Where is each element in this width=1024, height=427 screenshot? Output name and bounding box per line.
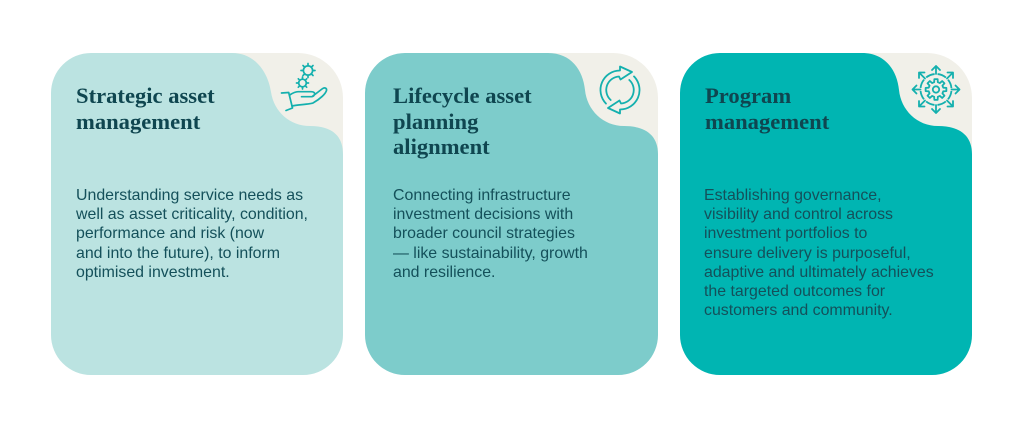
heading: program management — [705, 83, 830, 134]
heading: program management: Program — [705, 83, 791, 108]
icon: circular arrows — [600, 66, 640, 114]
panel: strategic asset management background — [51, 53, 343, 375]
panel: program management background — [680, 53, 972, 375]
text: strategic asset management description: and into the future), to inform — [76, 245, 280, 262]
text: lifecycle asset planning alignment description — [393, 187, 588, 281]
heading: lifecycle asset planning alignment: alignment — [393, 134, 490, 159]
panel: lifecycle asset planning alignment background — [365, 53, 658, 375]
heading: lifecycle asset planning alignment — [393, 83, 532, 159]
text: program management description: Establishing governance, — [704, 187, 882, 204]
text: program management description: adaptive and ultimately achieves — [704, 264, 934, 281]
text: program management description: customers and community. — [704, 302, 893, 319]
heading: program management: management — [705, 108, 829, 134]
text: lifecycle asset planning alignment description: broader council strategies — [393, 225, 575, 242]
text: program management description: investment portfolios to — [704, 225, 867, 242]
text: lifecycle asset planning alignment description: investment decisions with — [393, 206, 573, 223]
heading: strategic asset management — [76, 83, 215, 134]
icon: gear with radiating arrows — [912, 66, 960, 113]
heading: strategic asset management: management — [76, 108, 200, 134]
text: program management description: ensure delivery is purposeful, — [704, 245, 911, 262]
text: lifecycle asset planning alignment description: and resilience. — [393, 264, 495, 281]
text: strategic asset management description: well as asset criticality, condition, — [76, 206, 308, 223]
text: strategic asset management description: optimised investment. — [76, 264, 230, 281]
text: program management description: the targeted outcomes for — [704, 283, 885, 300]
heading: lifecycle asset planning alignment: planning — [393, 108, 478, 134]
text: strategic asset management description: Understanding service needs as — [76, 187, 303, 204]
text: lifecycle asset planning alignment description: Connecting infrastructure — [393, 187, 571, 204]
text: strategic asset management description: performance and risk (now — [76, 225, 264, 242]
heading: strategic asset management: Strategic asset — [76, 83, 215, 108]
text: strategic asset management description — [76, 187, 308, 281]
icon: hand holding gears — [282, 64, 327, 110]
text: lifecycle asset planning alignment description: — like sustainability, growth — [393, 245, 588, 262]
text: program management description: visibility and control across — [704, 206, 893, 223]
heading: lifecycle asset planning alignment: Lifecycle asset — [393, 83, 532, 108]
text: program management description — [704, 187, 934, 319]
